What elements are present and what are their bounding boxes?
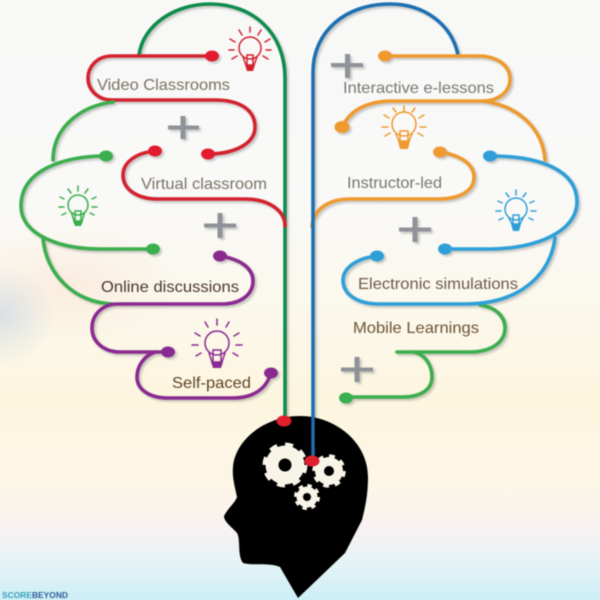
plus: center right — [399, 217, 431, 242]
right branch lines — [312, 4, 577, 462]
orange branch: connector — [483, 101, 545, 160]
purple branch: Self-paced — [137, 352, 278, 398]
head silhouette with gears — [224, 415, 368, 598]
orange branch: Instructor-led — [312, 146, 474, 226]
green branch: middle loop — [21, 150, 160, 254]
light blue branch: Electronic simulations — [343, 238, 555, 304]
label: Virtual classroom: Virtual classroom — [141, 176, 267, 193]
green branch: Online discussions connector — [43, 238, 113, 304]
left branch lines — [21, 4, 285, 420]
green branch: upper connector — [53, 102, 113, 160]
green branch: Mobile Learnings — [339, 305, 505, 404]
plus: center left — [204, 213, 236, 238]
label: Instructor-led: Instructor-led — [347, 175, 442, 192]
icon: purple bulb — [192, 319, 242, 368]
plus: lower right — [341, 357, 373, 382]
red node: green trunk end — [276, 416, 292, 426]
icon: green bulb — [59, 186, 97, 226]
light bulb icons — [59, 27, 536, 368]
blue trunk overlay — [311, 415, 315, 460]
medium gear — [314, 456, 344, 486]
head — [224, 416, 368, 598]
dark green trunk — [139, 4, 285, 420]
dark blue trunk — [313, 4, 458, 462]
icon: blue bulb — [496, 190, 536, 231]
red branch: Virtual classroom — [123, 146, 285, 226]
red branch: Video Classrooms — [88, 50, 255, 160]
plus: upper left — [168, 116, 199, 139]
plus signs — [168, 54, 431, 382]
icon: red bulb — [229, 27, 271, 71]
logo: ScoreBeyond: SCOREBEYOND — [2, 590, 68, 600]
plus: upper right — [331, 54, 363, 78]
label: Self-paced: Self-paced — [172, 375, 251, 392]
large gear — [264, 444, 306, 486]
icon: orange bulb — [382, 106, 426, 149]
red node: blue trunk end — [304, 456, 320, 466]
label: Online discussions: Online discussions — [101, 279, 239, 296]
label: Video Classrooms: Video Classrooms — [97, 77, 230, 94]
orange branch: Interactive e-lessons — [334, 50, 510, 133]
label: Mobile Learnings: Mobile Learnings — [353, 320, 479, 337]
small gear — [296, 486, 318, 508]
light blue branch: upper loop — [438, 150, 577, 254]
branch labels — [97, 77, 518, 392]
purple branch: Online discussions — [92, 250, 253, 358]
label: Electronic simulations: Electronic simulations — [358, 276, 518, 293]
label: Interactive e-lessons: Interactive e-lessons — [343, 80, 494, 97]
